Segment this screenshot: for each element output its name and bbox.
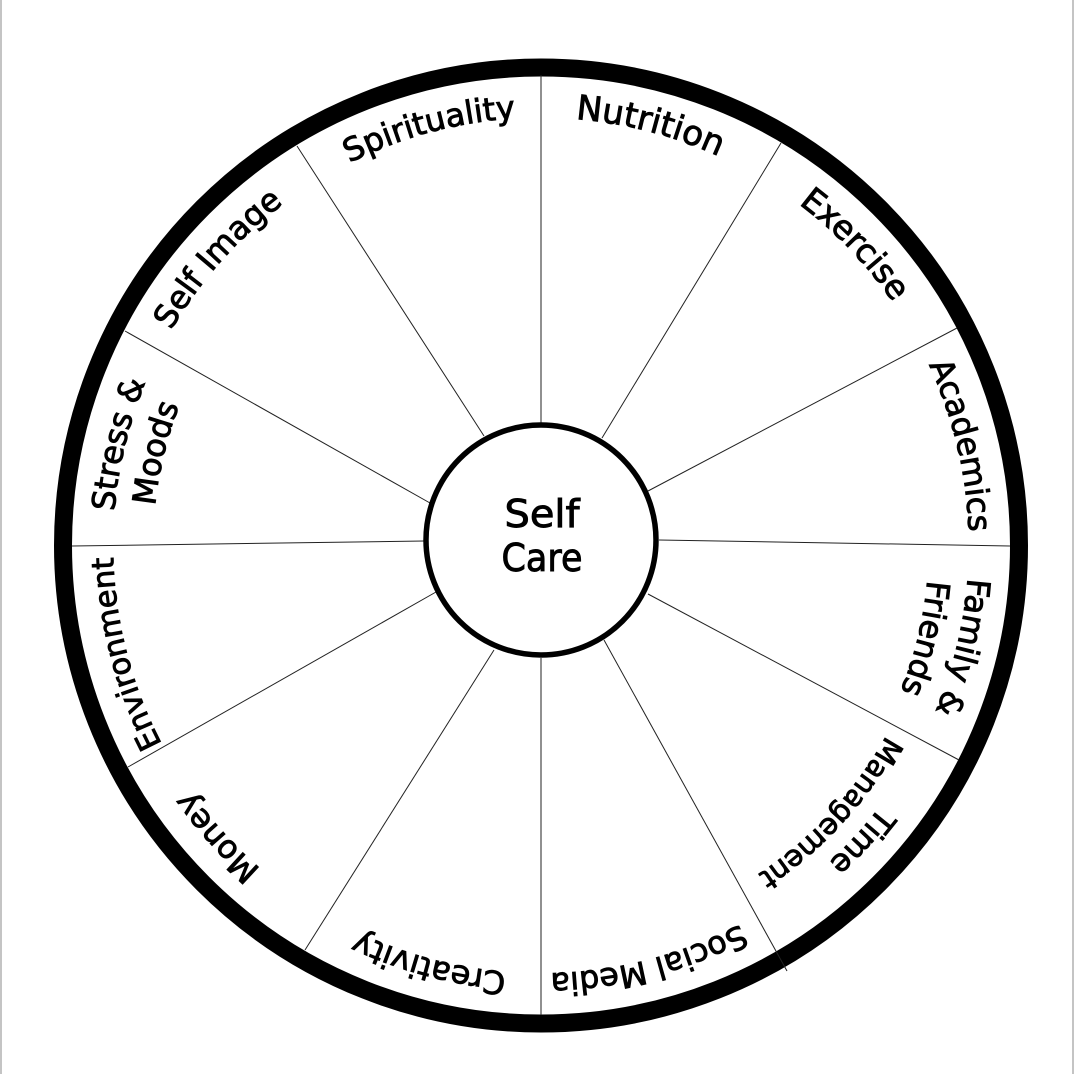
label: Family & Friends: Family & [935, 580, 992, 715]
label: Exercise: Exercise [800, 186, 904, 300]
spokes dividing the wheel into twelve segments [72, 75, 1010, 1015]
center label: Self Care [502, 492, 582, 580]
label: Time Management: Management [758, 737, 904, 888]
outer ring [63, 68, 1019, 1024]
label: Nutrition: Nutrition [578, 94, 722, 156]
label: Stress & Moods: Moods [132, 402, 178, 504]
label: Family & Friends: Friends [902, 582, 951, 696]
center label: Self Care: Care [502, 536, 582, 580]
label: Social Media: Social Media [552, 926, 748, 996]
label: Family & Friends [902, 580, 992, 715]
label: Stress & Moods [91, 379, 178, 510]
label: Self Image: Self Image [154, 193, 282, 328]
label: Stress & Moods: Stress & [91, 379, 146, 510]
label: Spirituality: Spirituality [342, 97, 514, 162]
label: Environment: Environment [92, 558, 162, 752]
label: Money: Money [176, 795, 259, 885]
label: Academics: Academics [928, 363, 990, 530]
center label: Self Care: Self [504, 492, 581, 536]
center circle [426, 425, 656, 655]
label: Creativity: Creativity [350, 931, 504, 995]
label: Time Management: Time [830, 812, 898, 872]
